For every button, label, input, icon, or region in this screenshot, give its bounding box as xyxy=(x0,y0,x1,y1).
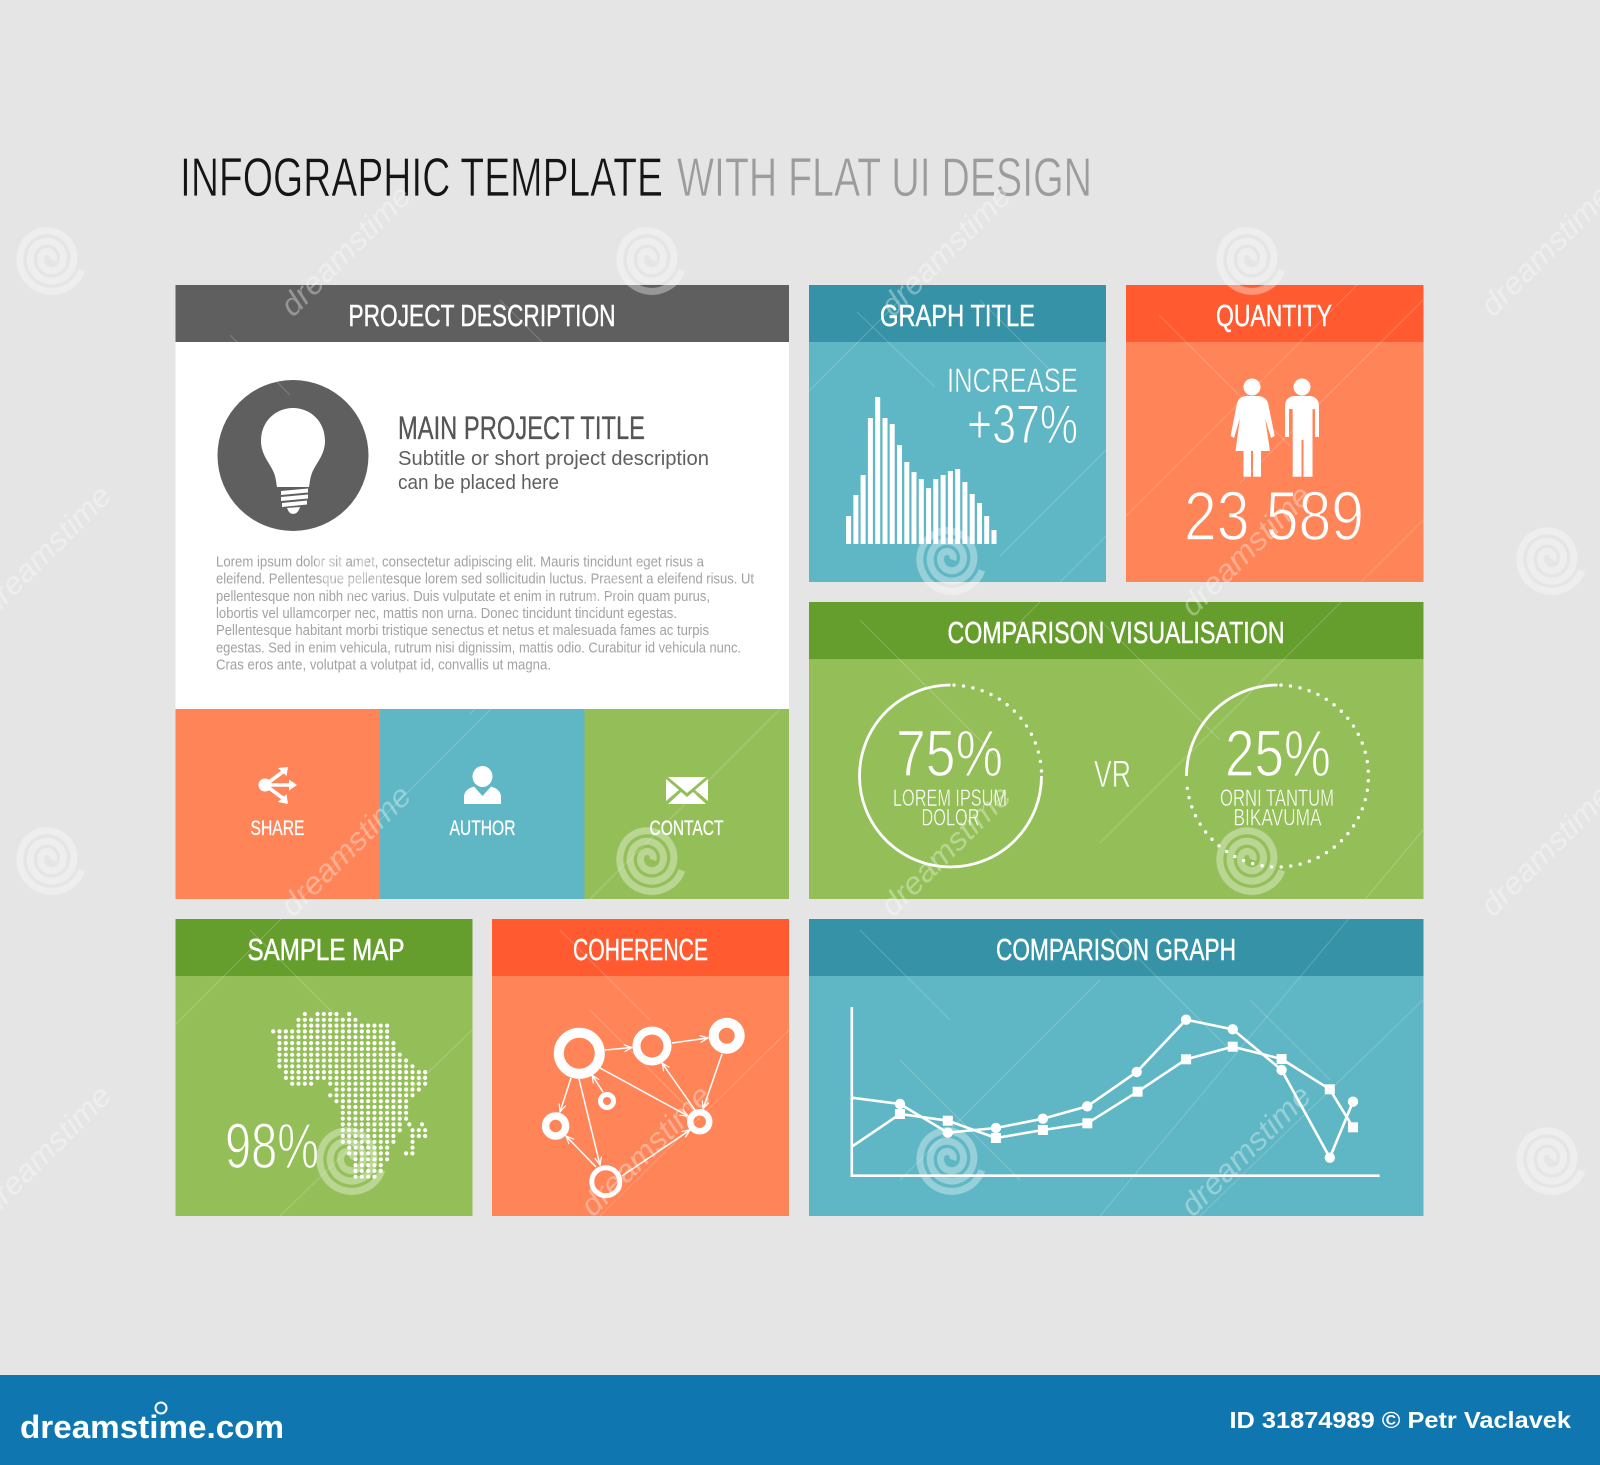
watermark: diagonal text: dreamstime xyxy=(873,178,1018,323)
gauge: 25 percent: 25% xyxy=(1225,716,1331,790)
text: lorem ipsum body: egestas. Sed in enim vehicula, rutrum nisi dignissim, mattis odio. Curabitur id vehicula nunc. xyxy=(216,640,741,656)
icon: light bulb xyxy=(218,380,368,531)
panel: project description xyxy=(176,285,789,899)
gauge: 75 percent xyxy=(860,685,1042,867)
watermark: spirals xyxy=(11,223,1591,1200)
text: subtitle xyxy=(398,447,709,494)
panel: coherence xyxy=(492,919,789,1216)
text: lorem ipsum body: pellentesque non nibh nec varius. Duis vulputate et enim in rutrum. Proin quam purus, xyxy=(216,589,710,605)
map: dotted Africa xyxy=(273,1014,425,1177)
watermark: diagonal text: dreamstime xyxy=(273,178,418,323)
panel: comparison visualisation xyxy=(809,602,1424,899)
text: increase: INCREASE xyxy=(947,362,1078,400)
watermark: diagonal text xyxy=(0,178,1600,1223)
heading: quantity: QUANTITY xyxy=(1216,299,1332,333)
series: square markers xyxy=(852,1042,1358,1147)
title: INFOGRAPHIC TEMPLATE xyxy=(180,146,663,208)
icon: woman and man xyxy=(1231,378,1319,477)
text: lorem ipsum body: Pellentesque habitant morbi tristique senectus et netus et malesuada fames ac turpis xyxy=(216,623,709,639)
text: lorem ipsum body xyxy=(216,554,754,673)
heading: graph title: GRAPH TITLE xyxy=(880,299,1035,333)
watermark: diagonal text: dreamstime xyxy=(1173,478,1318,623)
bar chart: histogram xyxy=(846,397,996,544)
line chart xyxy=(852,1007,1380,1176)
text: main project title: MAIN PROJECT TITLE xyxy=(398,410,645,446)
panel: comparison graph xyxy=(809,919,1424,1216)
tile: contact: CONTACT xyxy=(650,816,724,840)
watermark: diagonal text: dreamstime xyxy=(273,778,418,923)
heading: coherence: COHERENCE xyxy=(573,933,708,967)
footer credit: ID 31874989 © Petr Vaclavek xyxy=(1230,1407,1572,1433)
gauge: 25 percent xyxy=(1186,685,1368,867)
text: lorem ipsum body: lobortis vel ullamcorper nec, mattis non urna. Donec tincidunt tincidunt egestas. xyxy=(216,606,677,622)
panel: graph title xyxy=(809,285,1106,582)
title: WITH FLAT UI DESIGN xyxy=(677,146,1092,208)
watermark: diagonal text: dreamstime xyxy=(573,1078,718,1223)
icon: person xyxy=(464,766,501,804)
gauge: 25 percent: ORNI TANTUM xyxy=(1220,785,1334,812)
tile: share: SHARE xyxy=(250,816,304,840)
heading: comparison graph: COMPARISON GRAPH xyxy=(996,933,1236,967)
footer bar xyxy=(0,1375,1600,1465)
gauge: 75 percent: LOREM IPSUM xyxy=(893,785,1007,812)
text: lorem ipsum body: eleifend. Pellentesque pellentesque lorem sed sollicitudin luctus. Praesent a eleifend risus. Ut xyxy=(216,572,754,588)
text: plus 37 percent: +37% xyxy=(967,393,1078,455)
gauge: 25 percent: BIKAVUMA xyxy=(1234,804,1322,832)
gauge: 75 percent: DOLOR xyxy=(922,804,980,832)
heading: sample map: SAMPLE MAP xyxy=(248,933,404,967)
tile: share xyxy=(176,709,380,899)
tile: author xyxy=(380,709,584,899)
text: subtitle: can be placed here xyxy=(398,471,559,494)
watermark: diagonal text: dreamstime xyxy=(573,478,718,623)
series: circle markers xyxy=(852,1014,1358,1163)
panel: sample map xyxy=(176,919,472,1216)
heading: comparison visualisation: COMPARISON VISUALISATION xyxy=(948,616,1284,650)
gauge: 75 percent: 75% xyxy=(896,716,1003,790)
watermark: diagonal text: dreamstime xyxy=(1173,1078,1318,1223)
panel: quantity xyxy=(1126,285,1424,582)
text: quantity number: 23 589 xyxy=(1184,477,1364,555)
heading: project description: PROJECT DESCRIPTION xyxy=(348,299,616,333)
footer logo: dreamstime.com xyxy=(20,1409,284,1445)
text: lorem ipsum body: Cras eros ante, volutpat a volutpat id, convallis ut magna. xyxy=(216,657,551,673)
text: 98 percent: 98% xyxy=(225,1110,319,1182)
tile: author: AUTHOR xyxy=(450,816,516,840)
icon: envelope xyxy=(666,777,708,804)
text: VR: VR xyxy=(1094,754,1131,796)
icon: share arrows xyxy=(258,767,297,804)
text: lorem ipsum body: Lorem ipsum dolor sit amet, consectetur adipiscing elit. Mauris tincidunt eget risus a xyxy=(216,554,705,570)
tile: contact xyxy=(584,709,789,899)
text: subtitle: Subtitle or short project description xyxy=(398,447,709,470)
network diagram xyxy=(546,1023,740,1196)
watermark: diagonal text: dreamstime xyxy=(873,778,1018,923)
